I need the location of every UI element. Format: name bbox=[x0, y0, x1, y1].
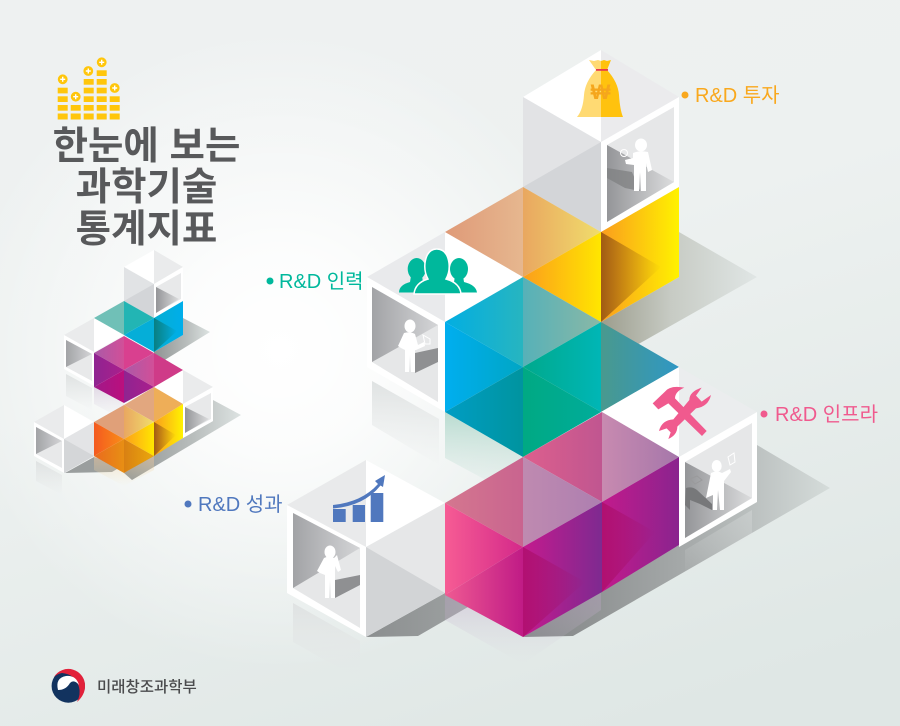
icon: coin stack chart bbox=[58, 57, 120, 120]
cube: R&D investment bbox=[523, 50, 679, 232]
cube: R&D personnel bbox=[367, 232, 523, 412]
mini orange block bbox=[94, 387, 183, 473]
block: magenta bbox=[445, 412, 679, 637]
icon: money bag: ₩ bbox=[591, 81, 611, 104]
icon: people bbox=[399, 249, 477, 294]
title: 통계지표 bbox=[76, 208, 217, 251]
miniature cube illustration bbox=[34, 250, 241, 495]
ministry logo bbox=[52, 669, 197, 703]
icon: money bag bbox=[577, 60, 623, 117]
title: 과학기술 bbox=[76, 166, 217, 209]
person with light bulb bbox=[607, 138, 652, 191]
shadow: output cube bbox=[366, 593, 480, 637]
reflections below blocks bbox=[293, 381, 752, 680]
icon: hammer and wrench bbox=[653, 387, 711, 439]
person on phone bbox=[317, 546, 360, 598]
mini magenta block bbox=[94, 336, 183, 403]
person with tablet bbox=[685, 453, 735, 510]
mini teal block bbox=[94, 301, 183, 352]
label: R&D infrastructure: R&D 인프라 bbox=[775, 403, 878, 426]
mini cube left bbox=[64, 318, 124, 386]
block: orange bbox=[445, 187, 679, 322]
label: R&D output: R&D 성과 bbox=[198, 493, 283, 516]
title: 한눈에 보는 bbox=[53, 125, 240, 168]
mini cube top bbox=[124, 250, 183, 318]
block: teal bbox=[445, 277, 679, 457]
title bbox=[53, 125, 240, 251]
cube: R&D infrastructure bbox=[601, 367, 757, 547]
label: R&D investment: R&D 투자 bbox=[695, 84, 780, 107]
icon: rising bar chart bbox=[333, 475, 385, 522]
mini cube bottom bbox=[34, 405, 94, 473]
person with laptop bbox=[398, 320, 438, 373]
mini cube right bbox=[154, 370, 213, 438]
cube: R&D output bbox=[287, 460, 445, 637]
ministry logo: 미래창조과학부 bbox=[97, 678, 197, 696]
label: R&D personnel: R&D 인력 bbox=[279, 270, 364, 293]
shadow: infrastructure cube bbox=[523, 445, 830, 637]
shadow: upper cube bbox=[601, 232, 757, 350]
